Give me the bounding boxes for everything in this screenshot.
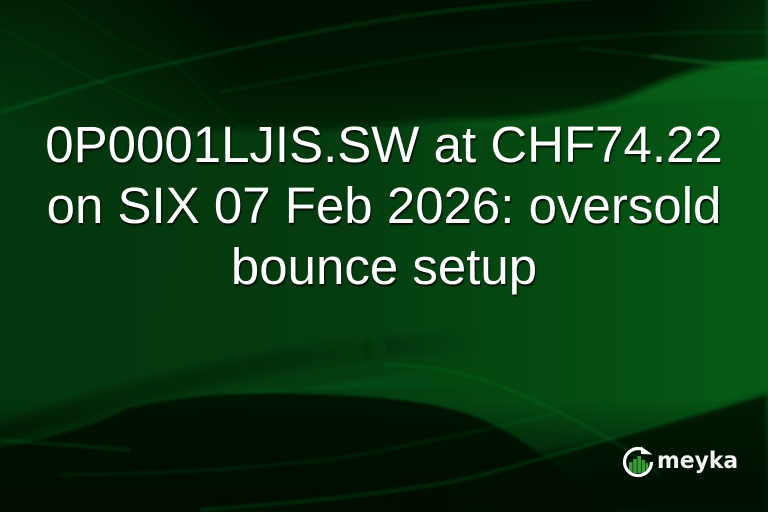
- title: bounce setup: [231, 238, 537, 295]
- wordmark: meyka: [657, 448, 738, 474]
- bottom dark bowl: [0, 393, 610, 512]
- bright band under bowl: [440, 58, 768, 130]
- top darkness with wave edge: [0, 0, 768, 130]
- lower left shadow above band: [0, 330, 480, 450]
- title: 0P0001LJIS.SW at CHF74.22: [45, 116, 723, 173]
- icon: ring with green bars: [622, 446, 654, 478]
- bottom fade: [0, 400, 768, 512]
- bright green band lower left: [40, 360, 520, 442]
- title: [45, 116, 723, 297]
- logo: meyka: [622, 446, 738, 478]
- bottom right dark: [400, 392, 768, 512]
- title: on SIX 07 Feb 2026: oversold: [47, 177, 721, 234]
